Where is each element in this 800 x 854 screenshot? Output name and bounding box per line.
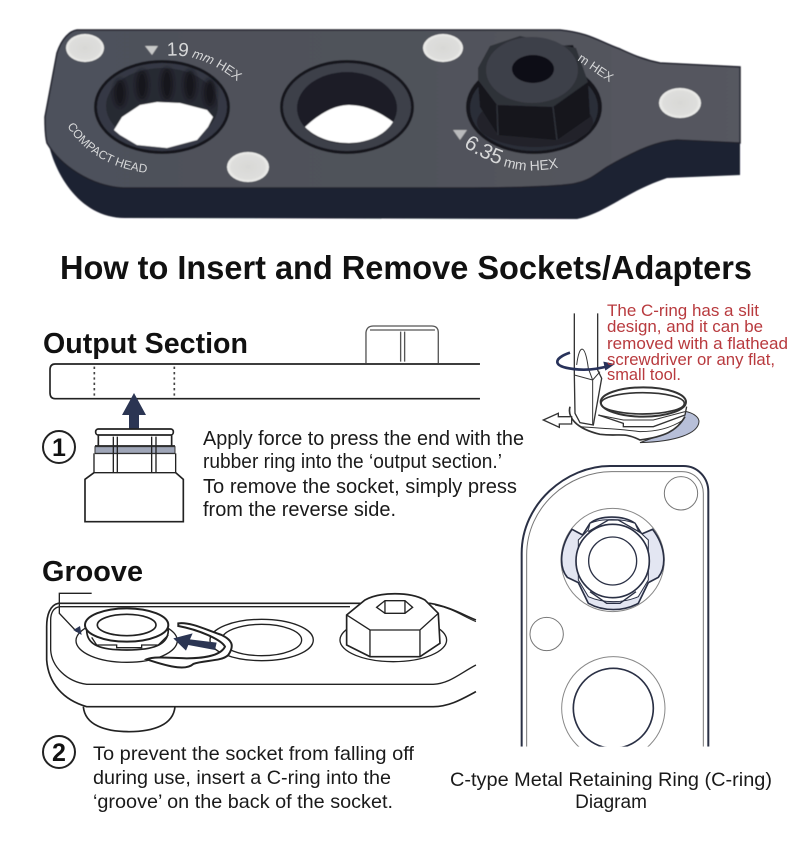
arrow mark: 6.35 mm [453, 130, 467, 140]
push arrow [173, 633, 217, 651]
text block: step 1 instructions [203, 428, 524, 521]
caption: Diagram [575, 792, 647, 813]
text block: step 1 instructions: To remove the socket, simply press [203, 476, 517, 498]
caption [450, 770, 772, 813]
C-ring [569, 407, 685, 440]
empty hole [210, 619, 313, 661]
badge: step 1: 1 [52, 434, 66, 462]
heading: output section: Output Section [43, 328, 248, 360]
wrench top plate [45, 30, 740, 188]
nut on tube [366, 326, 438, 363]
arrow: push up [122, 393, 146, 433]
C-ring [561, 508, 664, 612]
callout: red note: design, and it can be [607, 318, 763, 336]
label: 19 mm HEX: 19 mm HEX [168, 42, 242, 82]
text block: step 1 instructions: Apply force to press the end with the [203, 428, 524, 450]
leader arrow [59, 593, 92, 632]
text block: step 2 instructions: during use, insert a C-ring into the [93, 767, 391, 789]
wrench lower edge [47, 120, 740, 219]
screw: top centre [423, 34, 463, 62]
diagram: output section tube and nut [50, 326, 480, 399]
callout: red note [607, 302, 788, 384]
socket: output hole [280, 60, 414, 154]
text block: step 2 instructions: ‘groove’ on the back of the socket. [93, 791, 393, 813]
base ellipse [640, 411, 699, 443]
diagram: socket with rubber ring [85, 429, 183, 522]
callout: red note: screwdriver or any flat, [607, 351, 775, 369]
bottom socket [83, 707, 175, 732]
screw: bottom [227, 152, 269, 182]
socket top [87, 630, 168, 650]
callout: red note: The C-ring has a slit [607, 302, 759, 320]
diagram: groove on wrench [47, 593, 476, 732]
socket: 19 mm hole [94, 60, 230, 154]
arrow mark: 19 mm [145, 46, 158, 55]
photo: compact wrench head [45, 30, 740, 219]
caption: C-type Metal Retaining Ring (C-ring) [450, 770, 772, 791]
badge: step 2 [43, 736, 75, 768]
wrench outline [47, 603, 476, 707]
text block: step 2 instructions [93, 743, 415, 813]
groove ellipse [76, 619, 177, 662]
heading: groove: Groove [42, 556, 143, 588]
screwdriver [574, 313, 602, 425]
diagram: C-ring removal with screwdriver [543, 313, 699, 443]
label: compact head: COMPACT HEAD [68, 123, 147, 172]
callout: red note: removed with a flathead [607, 335, 788, 353]
badge: step 2: 2 [52, 739, 66, 767]
text block: step 2 instructions: To prevent the socket from falling off [93, 743, 415, 765]
text block: step 1 instructions: rubber ring into the ‘output section.’ [203, 451, 502, 473]
label: 6.35 mm HEX: 6.35 mm HEX [466, 136, 558, 171]
text block: step 1 instructions: from the reverse side. [203, 499, 396, 521]
white arrow [543, 413, 572, 427]
socket top [598, 407, 687, 427]
rotation arrow [557, 353, 610, 370]
callout: red note: small tool. [607, 366, 681, 384]
C-ring [147, 623, 232, 668]
title: How to Insert and Remove Sockets/Adapters [60, 250, 752, 287]
lower hole [561, 656, 666, 747]
socket: 6.35 mm with adapter [466, 36, 602, 154]
badge: step 1 [43, 431, 75, 463]
diagram: C-ring top view [522, 466, 708, 760]
screw: top left [66, 34, 104, 62]
label: m HEX: m HEX [578, 55, 614, 82]
hex adapter [340, 618, 447, 662]
screw: right [659, 88, 701, 118]
